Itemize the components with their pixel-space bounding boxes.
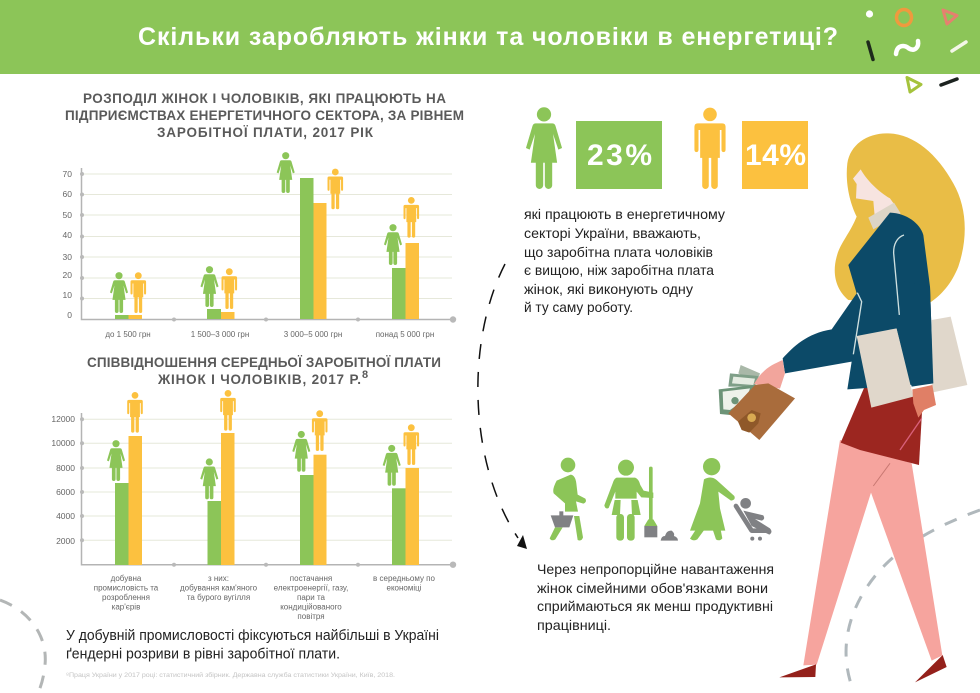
money	[719, 365, 760, 415]
pen	[900, 418, 922, 450]
wallet clasp	[738, 410, 761, 433]
stat box: 23%: 23%	[587, 139, 652, 172]
bar chart: distribution by wage level: 30	[63, 252, 72, 262]
wallet	[728, 383, 795, 440]
arrow: dashed curve	[478, 264, 527, 549]
heading: distribution chart: ЗАРОБІТНОЇ ПЛАТИ, 2017 РІК	[157, 125, 374, 140]
decorative confetti icons	[866, 10, 966, 92]
bar chart: average wages by industry: 12000	[51, 414, 75, 424]
heading: wage ratio chart: СПІВВІДНОШЕННЯ СЕРЕДНЬОЇ ЗАРОБІТНОЇ ПЛАТИ	[87, 355, 441, 370]
bar chart: average wages by industry: 10000	[51, 438, 75, 448]
hand with wallet	[754, 360, 785, 389]
bar chart: average wages by industry	[51, 390, 456, 621]
stat box: 14%: 14%	[745, 139, 806, 172]
bar chart: distribution by wage level: 3 000–5 000 грн	[284, 330, 342, 339]
legs	[803, 440, 942, 665]
conclusion text: ґендерні розриви в рівні заробітної плати.	[66, 646, 340, 662]
jacket	[783, 213, 933, 389]
text block: perception of wages	[524, 207, 725, 315]
stat box: 23%	[576, 121, 662, 189]
bar chart: distribution by wage level: 0	[67, 310, 72, 320]
heading: distribution chart: ПІДПРИЄМСТВАХ ЕНЕРГЕТИЧНОГО СЕКТОРА, ЗА РІВНЕМ	[65, 108, 464, 123]
skirt	[841, 380, 923, 465]
text block: perception of wages: що заробітна плата чоловіків	[524, 245, 713, 260]
bar chart: distribution by wage level: понад 5 000 грн	[376, 330, 434, 339]
bar chart: average wages by industry: промисловість та	[94, 584, 159, 592]
title: Скільки заробляють жінки та чоловіки в енергетиці?	[138, 23, 838, 51]
text block: household burden: Через непропорційне навантаження	[537, 562, 774, 577]
heading: wage ratio chart: ЖІНОК І ЧОЛОВІКІВ, 2017 Р.	[157, 372, 361, 387]
bar chart: average wages by industry: 2000	[56, 536, 75, 546]
bar chart: distribution by wage level: 10	[63, 290, 72, 300]
bar chart: distribution by wage level: 60	[63, 189, 72, 199]
bar chart: average wages by industry: кондиційованого	[280, 602, 342, 612]
wallet button	[747, 413, 756, 422]
text block: perception of wages: які працюють в енергетичному	[524, 207, 725, 222]
bar chart: average wages by industry: електроенергії, газу,	[274, 584, 348, 592]
bar chart: average wages by industry: постачання	[290, 574, 332, 583]
bar chart: average wages by industry: розроблення	[102, 593, 150, 602]
heading: wage ratio chart	[87, 355, 441, 387]
bar chart: distribution by wage level: до 1 500 грн	[105, 330, 151, 339]
dashed decorative arc bottom left	[0, 600, 45, 693]
dashed decorative arc right	[846, 510, 980, 684]
text block: perception of wages: секторі України, вважають,	[524, 226, 701, 241]
bar chart: average wages by industry: 8000	[56, 463, 75, 473]
conclusion text	[66, 628, 439, 662]
bar chart: average wages by industry: та бурого вугілля	[187, 593, 250, 602]
bar chart: average wages by industry: економіці	[386, 584, 422, 592]
bar chart: average wages by industry: кар'єрів	[112, 602, 140, 612]
bar chart: average wages by industry: 4000	[56, 511, 75, 521]
text block: perception of wages: й ту саму роботу.	[524, 300, 633, 315]
bar chart: distribution by wage level: 1 500–3 000 грн	[191, 330, 249, 339]
folder	[857, 317, 967, 408]
heading: wage ratio chart: 8	[362, 369, 368, 381]
hair	[835, 133, 965, 303]
text block: household burden: сприймаються як менш продуктивні	[537, 599, 773, 614]
bar chart: distribution by wage level: 40	[63, 230, 72, 240]
leg crease	[873, 463, 890, 486]
bar chart: average wages by industry: добування кам'яного	[180, 584, 258, 592]
shoes	[779, 655, 947, 682]
stat box: 14%	[742, 121, 808, 189]
jacket seams	[853, 235, 904, 354]
bar chart: distribution by wage level: 20	[63, 270, 72, 280]
hand on folder	[912, 385, 936, 418]
bar chart: distribution by wage level	[63, 152, 456, 339]
header band	[0, 0, 980, 74]
heading: distribution chart: РОЗПОДІЛ ЖІНОК І ЧОЛОВІКІВ, ЯКІ ПРАЦЮЮТЬ НА	[83, 91, 446, 106]
bar chart: average wages by industry: пари та	[297, 593, 326, 602]
text block: household burden: жінок сімейними обов'язками вони	[537, 581, 768, 596]
illustration: walking woman	[719, 133, 967, 682]
bar chart: average wages by industry: з них:	[208, 574, 229, 583]
icon: man large	[694, 108, 726, 189]
text block: perception of wages: є вищою, ніж заробітна плата	[524, 263, 714, 278]
icon: woman large	[526, 107, 562, 189]
icons: household duties	[550, 458, 771, 541]
text block: household burden	[537, 562, 774, 633]
bar chart: distribution by wage level: 70	[63, 169, 72, 179]
face and neck	[853, 169, 898, 220]
collar	[868, 203, 901, 229]
bar chart: average wages by industry: добувна	[111, 574, 142, 583]
bar chart: average wages by industry: 6000	[56, 487, 75, 497]
bar chart: distribution by wage level: 50	[63, 210, 72, 220]
sleeve	[897, 280, 933, 387]
bar chart: average wages by industry: в середньому по	[373, 574, 436, 583]
heading: distribution chart	[65, 91, 464, 140]
conclusion text: У добувній промисловості фіксуються найбільші в Україні	[66, 628, 439, 644]
text block: perception of wages: жінок, які виконують одну	[524, 282, 693, 297]
bar chart: average wages by industry: повітря	[297, 612, 325, 621]
text block: household burden: працівниці.	[537, 618, 611, 633]
footnote: ⁸Праця України у 2017 році: статистичний збірник. Державна служба статистики України, Київ, 2018.	[66, 671, 395, 679]
